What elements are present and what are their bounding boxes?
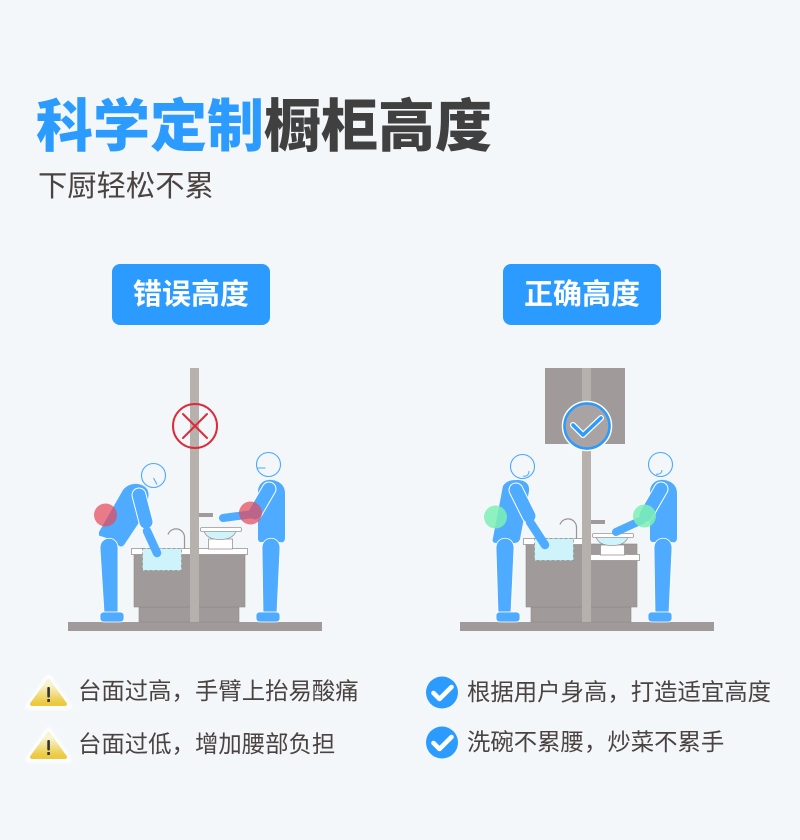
icon: warning 1	[28, 677, 69, 707]
text: benefit 1: 根据用户身高，打造适宜高度	[467, 679, 771, 705]
bowl on counter	[200, 528, 242, 549]
label: correct height	[503, 264, 661, 325]
label: correct height: 正确高度	[524, 279, 640, 311]
text: benefit 2: 洗碗不累腰，炒菜不累手	[467, 729, 724, 755]
cabinet	[132, 548, 248, 622]
illustration: wrong height scene	[68, 368, 322, 631]
text: problem 1: 台面过高，手臂上抬易酸痛	[78, 678, 359, 704]
pole	[190, 368, 199, 622]
pole	[582, 368, 591, 622]
pain marker: arm	[239, 502, 262, 524]
cabinet	[524, 538, 640, 622]
title: 科学定制橱柜高度	[36, 95, 492, 159]
icon: warning 2	[28, 730, 69, 760]
bowl on counter	[592, 534, 634, 555]
label: wrong height: 错误高度	[133, 279, 249, 311]
sink	[142, 548, 182, 570]
icon: red cross	[173, 404, 217, 448]
figure: bent person	[99, 464, 166, 622]
comfort marker: back	[484, 506, 507, 528]
comfort marker: arm	[633, 504, 656, 528]
icon: check 1	[426, 676, 458, 708]
label: wrong height	[112, 264, 270, 325]
sink	[534, 538, 574, 560]
icon: blue check	[562, 402, 612, 450]
wall cabinet	[545, 368, 625, 444]
figure: right person	[616, 452, 677, 622]
icon: check 2	[426, 726, 458, 758]
tap handle	[199, 513, 213, 517]
pain marker: back	[94, 504, 117, 526]
tap handle	[591, 520, 605, 524]
faucet	[560, 519, 577, 539]
figure: standing person	[223, 452, 285, 622]
text: problem 2: 台面过低，增加腰部负担	[78, 731, 335, 757]
illustration: correct height scene	[460, 368, 714, 631]
floor	[460, 622, 714, 631]
subtitle: 下厨轻松不累	[38, 170, 214, 203]
floor	[68, 622, 322, 631]
faucet	[168, 529, 185, 549]
figure: left person	[493, 454, 545, 622]
